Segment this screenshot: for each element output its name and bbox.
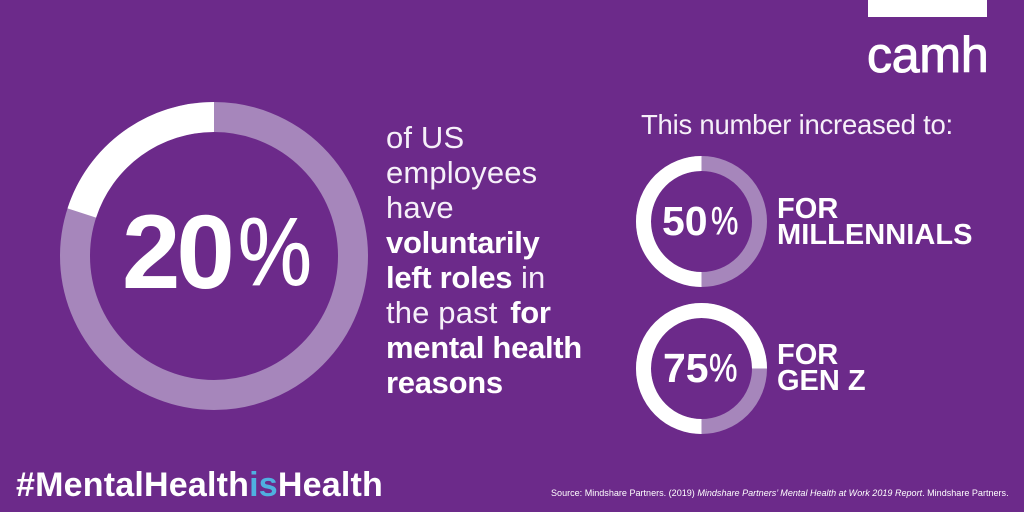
main statement: of US [386, 120, 464, 155]
big number: % [238, 199, 312, 306]
main statement: left roles in [386, 260, 545, 295]
value: 50%: 50 [662, 198, 708, 244]
donut chart: 50% [636, 156, 767, 287]
donut chart: 20% [60, 102, 368, 410]
label: for gen z: GEN Z [777, 365, 866, 397]
main statement: voluntarily [386, 225, 539, 260]
label: for gen z [777, 339, 866, 397]
main statement: the past for [386, 295, 551, 330]
value: 75%: 75 [663, 345, 709, 391]
subheading: This number increased to: [641, 109, 953, 140]
hashtag: #MentalHealthisHealth [16, 466, 383, 504]
big number [122, 194, 312, 311]
big number: 20 [122, 194, 231, 311]
label: for millennials [777, 193, 972, 251]
value: 50%: % [711, 199, 738, 243]
label: for millennials: FOR [777, 193, 838, 225]
main statement: employees [386, 155, 537, 190]
label: for millennials: MILLENNIALS [777, 219, 972, 251]
value: 50% [662, 198, 738, 244]
label: for gen z: FOR [777, 339, 838, 371]
logo wordmark: camh [867, 27, 988, 83]
main statement: have [386, 190, 454, 225]
main statement: reasons [386, 365, 503, 400]
value: 75%: % [709, 346, 737, 390]
main statement: mental health [386, 330, 582, 365]
logo white bar [868, 0, 987, 17]
source note: Source: Mindshare Partners. (2019) Mindshare Partners’ Mental Health at Work 2019 Report. Mindshare Partners. [551, 488, 1009, 498]
value: 75% [663, 345, 737, 391]
donut chart: 75% [636, 303, 767, 434]
main statement [386, 120, 582, 400]
logo: camh [867, 0, 988, 83]
